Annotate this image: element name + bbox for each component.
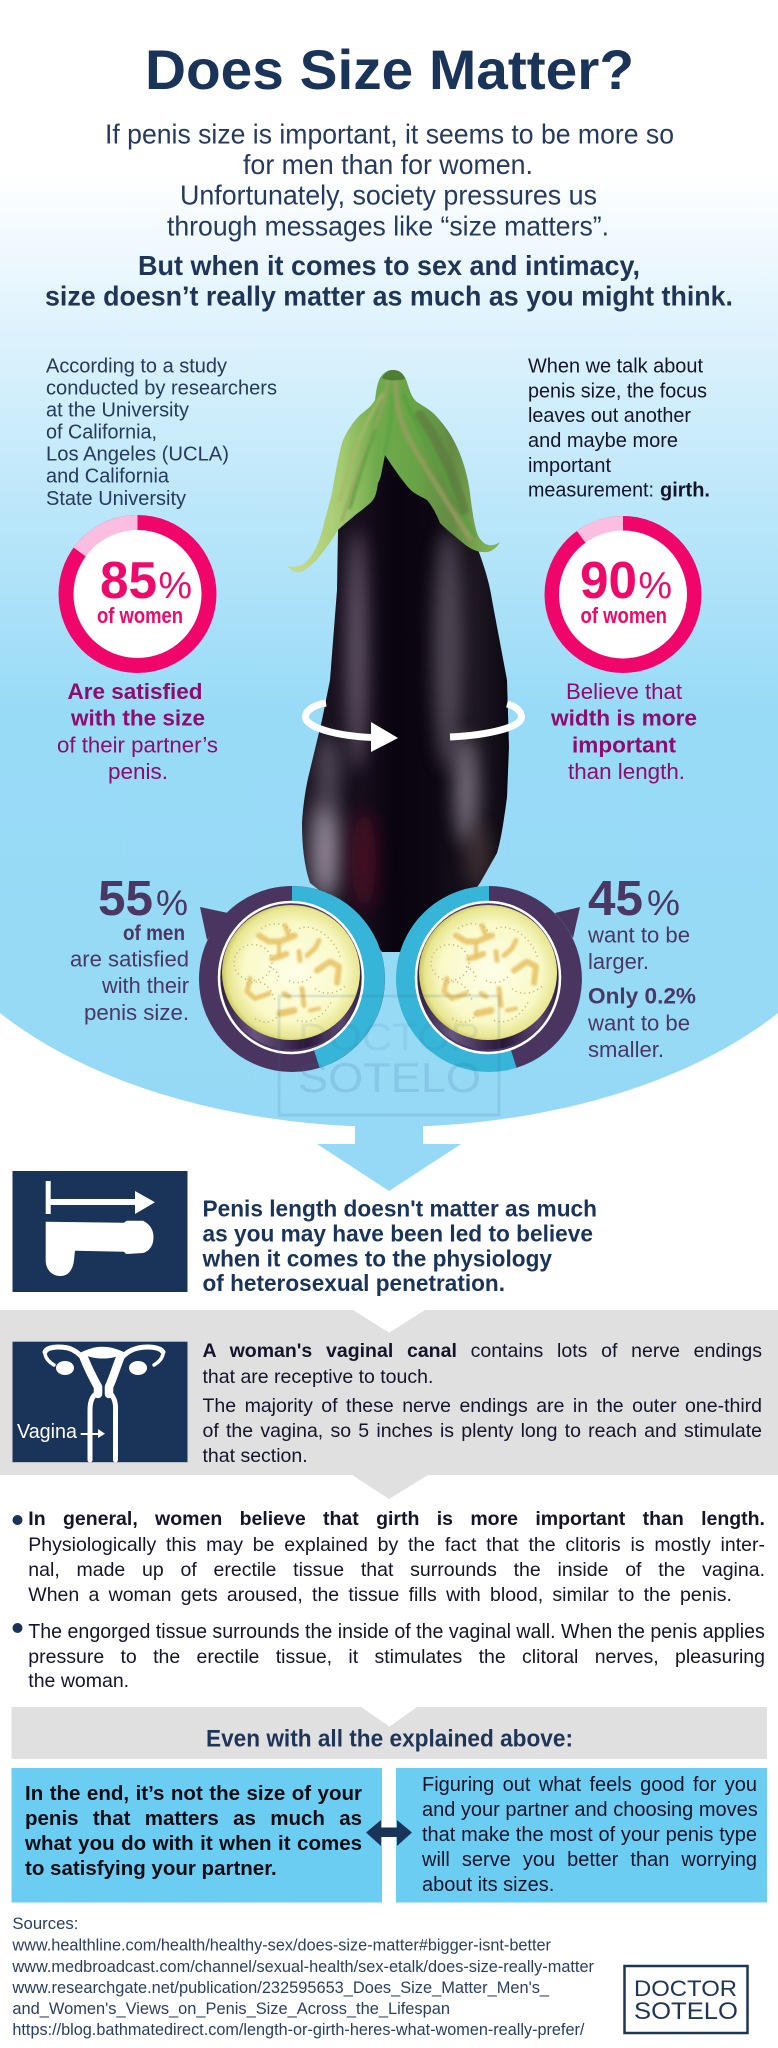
sources: and_Women's_Views_on_Penis_Size_Across_the_Lifespan	[12, 1999, 450, 2018]
arrow: down from top panel	[317, 1120, 461, 1191]
callout: penis length: as you may have been led to believe	[202, 1220, 593, 1246]
left stat: 55% of men: of men	[123, 922, 185, 945]
left caption: satisfied with size: penis.	[108, 759, 168, 784]
left study text: State University	[46, 487, 187, 510]
bullets	[12, 1515, 22, 1633]
bold intro statement: size doesn’t really matter as much as you might think.	[45, 280, 733, 312]
text: right blue box advice: Figuring out what feels good for you	[422, 1774, 757, 1796]
text: vaginal canal explanation	[202, 1340, 762, 1467]
text: vaginal canal explanation: that are receptive to touch.	[202, 1366, 433, 1388]
right donut: 90% of women	[544, 516, 702, 673]
left donut: 85% of women: %	[158, 565, 192, 607]
right girth text: important	[528, 454, 611, 477]
title: Does Size Matter?	[145, 38, 634, 101]
right girth text: and maybe more	[528, 429, 678, 452]
left donut: 85% of women	[58, 515, 216, 673]
text: left blue box conclusion: In the end, it’s not the size of your	[25, 1782, 362, 1805]
left stat: 55% of men: penis size.	[84, 1000, 189, 1025]
grey banner heading	[12, 1707, 767, 1759]
icon: female anatomy	[12, 1342, 188, 1462]
left stat: 55% of men: %	[156, 884, 188, 923]
right blue box	[396, 1768, 767, 1902]
left blue box	[12, 1768, 382, 1902]
right stat: 45% larger, 0.2% smaller: want to be	[587, 922, 690, 948]
intro text: for men than for women.	[243, 149, 533, 180]
left caption: satisfied with size: with the size	[70, 706, 205, 730]
grey banner heading: Even with all the explained above:	[206, 1726, 573, 1752]
second paragraph line: engorged tissue: The engorged tissue surrounds the inside of the vaginal wall. When the penis applies	[28, 1621, 765, 1643]
right donut: 90% of women: of women	[580, 603, 667, 628]
right stat: 45% larger, 0.2% smaller: want to be	[587, 1010, 690, 1036]
right caption: width over length: Believe that	[566, 679, 682, 704]
logo: Doctor Sotelo: SOTELO	[634, 1998, 738, 2025]
icon: length measure	[12, 1171, 188, 1292]
logo: Doctor Sotelo: DOCTOR	[634, 1976, 737, 2001]
left study text: of California,	[46, 420, 157, 444]
callout: penis length: when it comes to the physiology	[202, 1246, 552, 1272]
text: left blue box conclusion	[25, 1782, 362, 1880]
left stat: 55% of men	[70, 872, 189, 1025]
right stat: 45% larger, 0.2% smaller: Only 0.2%	[588, 984, 696, 1008]
left stat: 55% of men: 55	[98, 872, 153, 926]
right caption: width over length: important	[572, 732, 677, 758]
sources	[11, 1914, 594, 2039]
right girth text: measurement:	[528, 478, 654, 502]
text: girth explanation paragraphs: Physiologically this may be explained by the fact that the clitoris is mostly inter-	[28, 1534, 765, 1556]
right girth text: leaves out another	[528, 404, 691, 427]
sources: www.medbroadcast.com/channel/sexual-health/sex-etalk/does-size-really-matter	[11, 1957, 594, 1976]
girth rotation arrow	[306, 703, 522, 752]
right caption: width over length: width is more	[550, 706, 697, 730]
intro text: If penis size is important, it seems to be more so	[105, 118, 674, 150]
left donut: 85% of women: of women	[97, 603, 183, 628]
background: sky gradient panel with curved bottom	[0, 0, 778, 1127]
right stat: 45% larger, 0.2% smaller: smaller.	[588, 1037, 664, 1062]
bold intro statement	[45, 250, 733, 312]
right donut: 90% of women: 90	[580, 552, 637, 610]
text: vaginal canal explanation: that section.	[202, 1445, 308, 1467]
watermark logo: SOTELO	[298, 1054, 481, 1101]
right stat: 45% larger, 0.2% smaller: 45	[588, 872, 643, 926]
watermark logo	[279, 996, 499, 1115]
right caption: width over length	[550, 679, 697, 784]
right stat: 45% larger, 0.2% smaller: larger.	[588, 949, 649, 974]
text: left blue box conclusion: to satisfying your partner.	[25, 1857, 277, 1880]
intro text	[105, 118, 674, 242]
callout: penis length	[202, 1196, 597, 1296]
double arrow	[366, 1820, 412, 1846]
text: right blue box advice: and your partner and choosing moves	[422, 1799, 758, 1821]
right stat: 45% larger, 0.2% smaller: %	[647, 884, 680, 923]
left study text	[46, 354, 277, 510]
logo: Doctor Sotelo	[624, 1966, 748, 2033]
right ring with eggplant slice: 45%	[396, 886, 582, 1072]
right girth text: When we talk about	[528, 354, 703, 378]
sources: https://blog.bathmatedirect.com/length-or-girth-heres-what-women-really-prefer/	[12, 2020, 585, 2039]
intro text: Unfortunately, society pressures us	[180, 180, 597, 210]
text: girth explanation paragraphs: pressure to the erectile tissue, it stimulates the clitoral nerves, pleasuring	[28, 1646, 765, 1668]
watermark logo: DOCTOR	[298, 1017, 481, 1059]
callout: penis length: of heterosexual penetration.	[202, 1270, 505, 1296]
intro text: through messages like “size matters”.	[167, 210, 609, 242]
text: left blue box conclusion: what you do with it when it comes	[25, 1832, 362, 1855]
left donut: 85% of women: 85	[100, 552, 157, 610]
text: right blue box advice: will serve you better than worrying	[422, 1849, 757, 1871]
text: right blue box advice	[422, 1774, 758, 1896]
text: right blue box advice: that make the most of your penis type	[422, 1824, 757, 1846]
text: vaginal canal explanation: of the vagina, so 5 inches is plenty long to reach and stimulate	[202, 1420, 762, 1442]
callout: penis length: Penis length doesn't matter as much	[202, 1196, 597, 1222]
grey band: vaginal canal	[0, 1310, 778, 1499]
text: vaginal canal explanation: The majority of these nerve endings are in the outer one-third	[202, 1395, 762, 1417]
left study text: conducted by researchers	[46, 376, 277, 400]
left study text: at the University	[46, 398, 190, 422]
sources: www.researchgate.net/publication/232595653_Does_Size_Matter_Men's_	[11, 1978, 550, 1997]
icon: female anatomy: Vagina	[17, 1421, 78, 1443]
right girth text: girth.	[660, 478, 710, 502]
left study text: and California	[46, 464, 170, 488]
sources: www.healthline.com/health/healthy-sex/does-size-matter#bigger-isnt-better	[11, 1936, 551, 1954]
left stat: 55% of men: are satisfied	[70, 946, 189, 972]
left study text: According to a study	[46, 354, 228, 378]
right caption: width over length: than length.	[568, 759, 685, 784]
bold intro statement: But when it comes to sex and intimacy,	[138, 250, 640, 281]
left ring with eggplant slice: 55%	[199, 886, 385, 1072]
right stat: 45% larger, 0.2% smaller	[587, 872, 696, 1062]
right girth text	[528, 354, 710, 502]
eggplant leaf cap	[288, 370, 500, 572]
left stat: 55% of men: with their	[101, 973, 189, 998]
text: left blue box conclusion: penis that matters as much as	[25, 1807, 362, 1830]
left caption: satisfied with size: Are satisfied	[68, 679, 202, 704]
text: girth explanation paragraphs: When a woman gets aroused, the tissue fills with blood, similar to the penis.	[28, 1584, 732, 1606]
sources: Sources:	[12, 1914, 78, 1933]
text: girth explanation paragraphs: In general, women believe that girth is more important than length.	[28, 1508, 765, 1530]
text: girth explanation paragraphs	[28, 1508, 765, 1692]
text: vaginal canal explanation: A woman's vaginal canal contains lots of nerve endings	[202, 1340, 762, 1362]
text: girth explanation paragraphs: nal, made up of erectile tissue that surrounds the inside of the vagina.	[28, 1559, 765, 1581]
right donut: 90% of women: %	[638, 565, 672, 607]
text: girth explanation paragraphs: the woman.	[28, 1670, 129, 1692]
right girth text: penis size, the focus	[528, 380, 707, 402]
text: right blue box advice: about its sizes.	[422, 1874, 554, 1896]
left caption: satisfied with size	[57, 679, 218, 784]
eggplant illustration	[288, 370, 509, 952]
left caption: satisfied with size: of their partner’s	[57, 732, 218, 758]
left study text: Los Angeles (UCLA)	[46, 442, 229, 466]
